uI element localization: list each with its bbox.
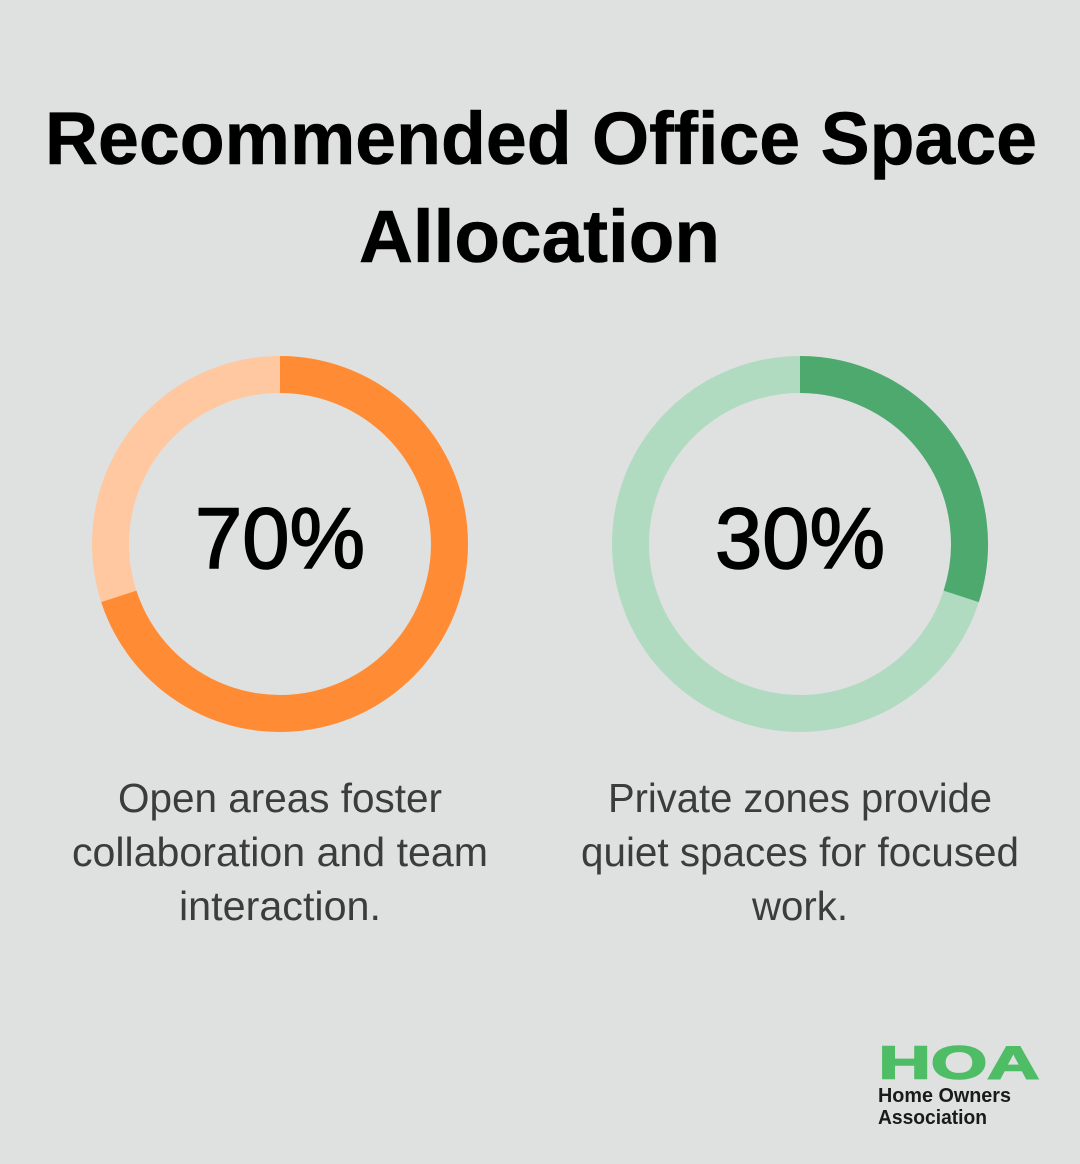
description: open areas: Open areas foster (118, 775, 442, 821)
logo: HOA Home Owners Association: HOA (878, 1036, 1040, 1088)
donut chart: 70% (110, 374, 450, 714)
description: private zones: Private zones provide (608, 775, 992, 821)
value: 30%: 30% (715, 491, 885, 587)
value: 70%: 70% (195, 491, 365, 587)
title: Recommended Office Space (45, 97, 1037, 180)
logo: HOA Home Owners Association: Home Owners (878, 1085, 1011, 1107)
logo: HOA Home Owners Association (878, 1036, 1040, 1129)
description: private zones: quiet spaces for focused (581, 829, 1019, 875)
description: open areas (72, 775, 488, 929)
description: private zones: work. (751, 883, 848, 929)
title (45, 97, 1037, 278)
panel: open areas 70% (72, 374, 488, 929)
description: open areas: collaboration and team (72, 829, 488, 875)
donut chart: 30% (630, 374, 970, 714)
description: private zones (581, 775, 1019, 929)
description: open areas: interaction. (179, 883, 381, 929)
panel: private zones 30% (581, 374, 1019, 929)
logo: HOA Home Owners Association: Association (878, 1107, 987, 1129)
title: Allocation (359, 195, 720, 278)
